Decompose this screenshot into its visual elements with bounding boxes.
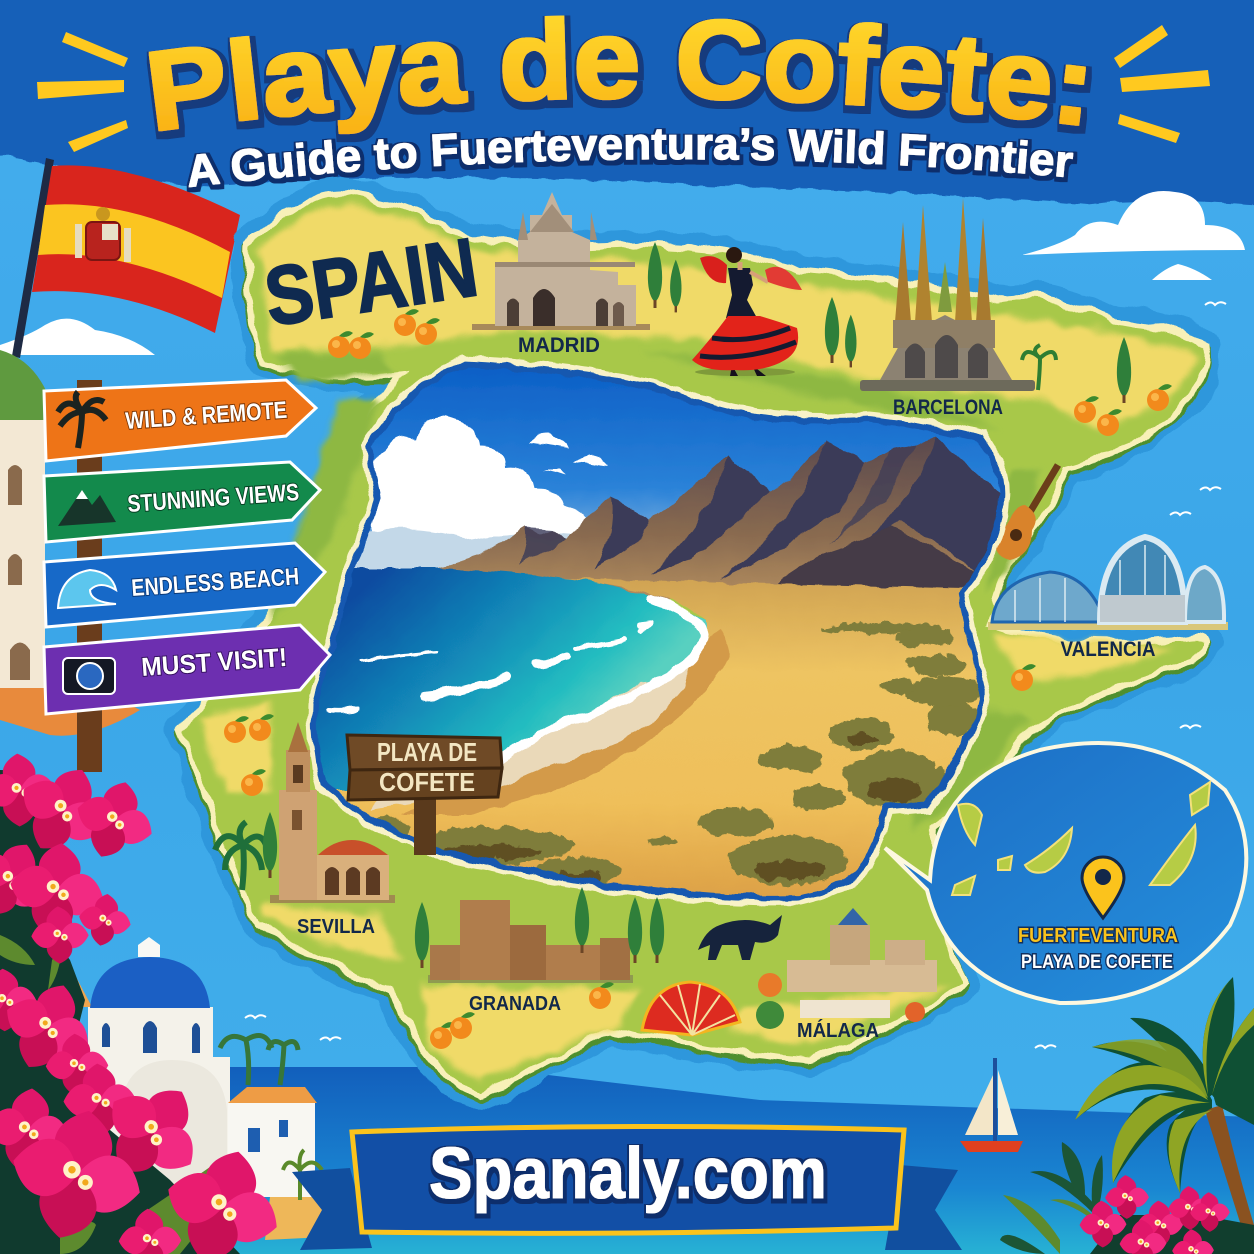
dark foreground ridge [778, 526, 974, 588]
sign: endless beach [44, 543, 325, 627]
church dome [90, 957, 210, 1008]
yellow land patches [200, 205, 1197, 1080]
landmark: madrid palace [472, 192, 650, 330]
icon: palm [58, 392, 106, 448]
icon: red fan [642, 982, 740, 1035]
bubble [885, 743, 1246, 1003]
leaves [1000, 1142, 1103, 1254]
dark fronds [1075, 977, 1254, 1193]
decorative rays right of title [1114, 25, 1210, 143]
church windows [102, 1021, 200, 1053]
icon: location pin [1082, 857, 1124, 918]
birds [245, 302, 1226, 1048]
trees near madrid [648, 242, 857, 367]
scene border cream [309, 358, 1007, 903]
hand fan [765, 267, 802, 290]
label barcelona: BARCELONA [893, 396, 1003, 419]
map label SPAIN: SPAIN [259, 220, 483, 344]
flag pole [12, 158, 54, 358]
signpost arrows [44, 380, 330, 714]
palms behind church [220, 1036, 298, 1085]
green tints [270, 350, 1040, 830]
sky [369, 367, 1000, 569]
icon: mountains [58, 490, 116, 526]
oranges east coast [1011, 664, 1036, 691]
sign: endless beach: ENDLESS BEACH [131, 563, 300, 602]
sign: stunning views [44, 462, 320, 542]
white buildings left edge [0, 350, 140, 736]
sign: must visit [44, 625, 330, 714]
beach scene [300, 355, 1020, 905]
oranges southwest [224, 714, 274, 796]
icon: flamenco dancer [692, 247, 802, 376]
green coastal edge and land base [180, 196, 1206, 1098]
clouds [350, 416, 609, 568]
ribbon tails [292, 1168, 372, 1250]
flag cloth [32, 165, 240, 333]
house roof [228, 1087, 317, 1103]
spanish flag [12, 158, 240, 358]
subtitle: A Guide to Fuerteventura’s Wild Frontier [186, 127, 1078, 192]
main heading: Playa de Cofete: [146, 16, 1092, 142]
coat of arms [75, 207, 131, 262]
side roof [35, 947, 92, 1007]
callout: fuerteventura locator [885, 743, 1246, 1003]
lower sea band [220, 1067, 1254, 1254]
palm tree bottom right [1075, 977, 1254, 1254]
clouds top right [1022, 191, 1245, 280]
landmark: malaga town [756, 908, 937, 1029]
label malaga: MÁLAGA [797, 1019, 879, 1042]
church and village bottom left [35, 937, 325, 1240]
bougainvillea flowers [0, 749, 298, 1254]
sand [336, 577, 980, 896]
sailboat [960, 1058, 1023, 1152]
landmark: granada alhambra [415, 887, 664, 983]
landmark: valencia arts centre [988, 537, 1228, 630]
wet sand [400, 630, 729, 815]
distant mountains [439, 436, 1005, 600]
palm small [1022, 345, 1056, 390]
landmark: sevilla tower [215, 722, 395, 903]
church lantern [138, 937, 160, 957]
label granada: GRANADA [469, 993, 561, 1015]
icon: guitar [996, 465, 1058, 560]
sign line two: COFETE [379, 767, 475, 797]
palm [215, 822, 268, 890]
sign: stunning views: STUNNING VIEWS [127, 479, 300, 518]
banner body [352, 1126, 904, 1233]
coastal water halo [180, 193, 1206, 1095]
website banner [292, 1126, 962, 1250]
waves [328, 598, 705, 775]
small palm [283, 1150, 322, 1200]
sign line one: PLAYA DE [377, 737, 477, 767]
sea [300, 568, 708, 790]
scene border blue [314, 363, 1002, 898]
sign post [77, 380, 102, 772]
flamenco skirt [692, 316, 798, 370]
oranges on map north [328, 309, 1172, 436]
icon: camera [63, 658, 115, 694]
label valencia: VALENCIA [1060, 638, 1156, 661]
leaves [0, 935, 240, 1254]
label sevilla: SEVILLA [297, 916, 375, 938]
icon: bull [698, 915, 782, 960]
callout line two: PLAYA DE COFETE [1021, 952, 1173, 973]
mountain shadow facets [519, 437, 1000, 580]
website text: Spanaly.com [429, 1134, 827, 1214]
shrubs [362, 623, 982, 887]
landmark: barcelona sagrada familia [860, 198, 1035, 391]
label madrid: MADRID [518, 334, 600, 357]
sign: must visit: MUST VISIT! [140, 642, 288, 682]
house wall [228, 1103, 315, 1197]
leaves and flowers bottom right [1000, 1142, 1254, 1254]
sign: wild and remote: WILD & REMOTE [125, 397, 288, 435]
sign: wild and remote [44, 380, 316, 461]
oranges south [430, 982, 614, 1049]
church wall [88, 1007, 230, 1190]
foam sand [370, 667, 689, 811]
map of spain [180, 193, 1206, 1098]
callout line one: FUERTEVENTURA [1018, 925, 1178, 947]
sand patch [265, 1197, 325, 1240]
wooden sign playa de cofete [347, 735, 502, 855]
dark foliage [0, 770, 240, 1254]
olive frond highlights [1075, 977, 1254, 1193]
cloud left [0, 319, 155, 355]
header banner [0, 0, 1254, 208]
decorative rays left of title [37, 32, 128, 152]
title [146, 16, 1092, 192]
icon: canary islands [952, 782, 1210, 895]
icon: wave [58, 570, 116, 608]
arched terrace [120, 1060, 227, 1190]
land fill [180, 193, 1206, 1095]
